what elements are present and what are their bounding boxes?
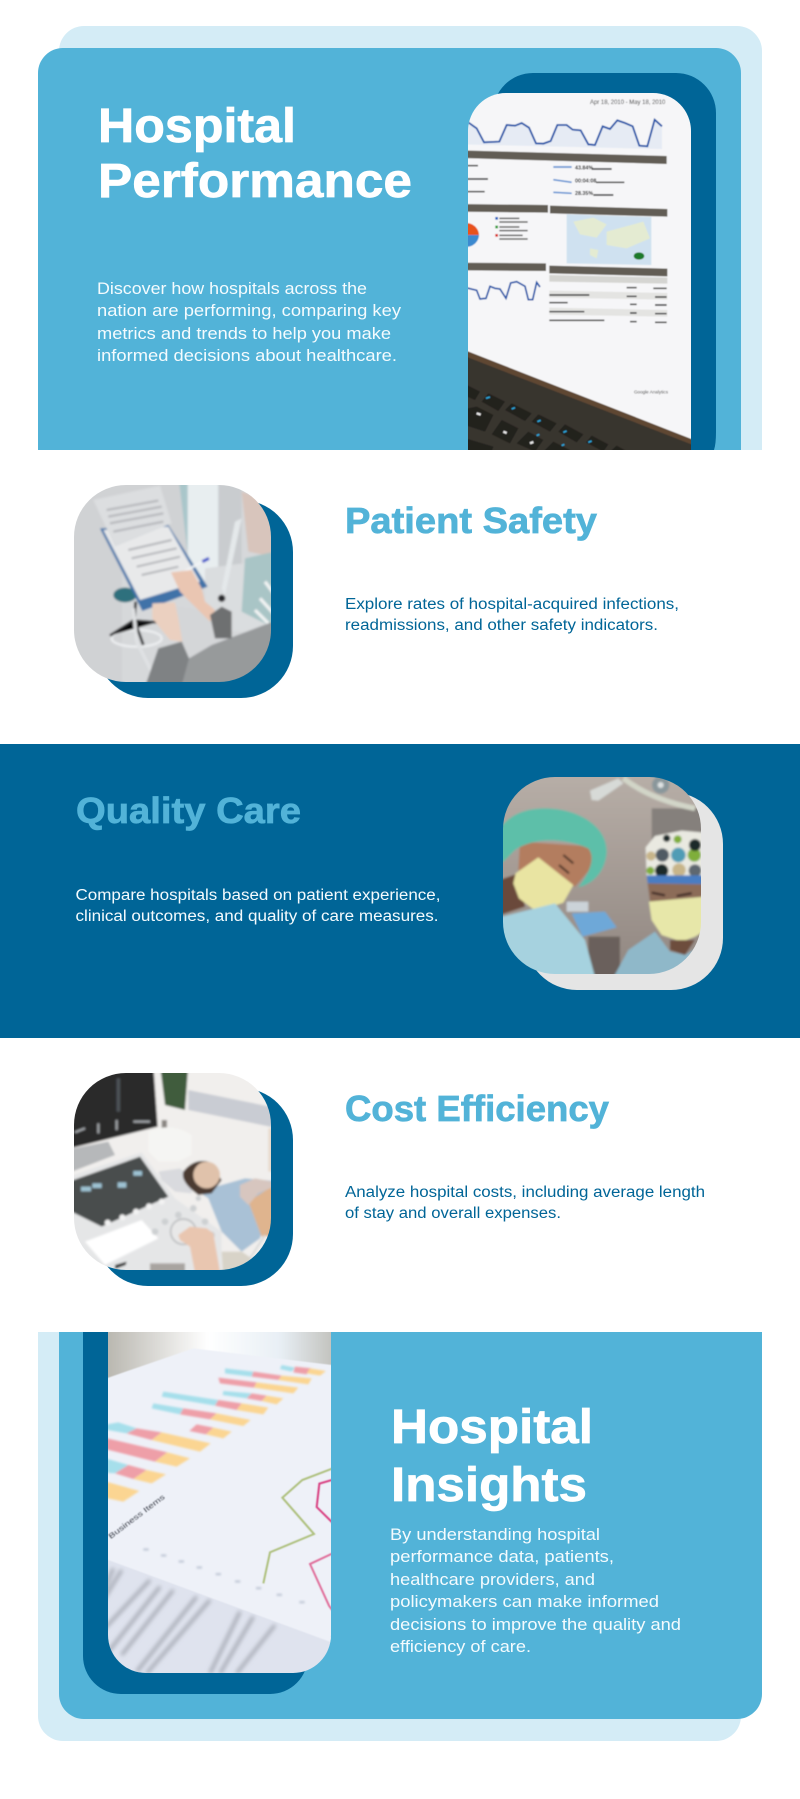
hero description <box>97 280 402 365</box>
hero title: Hospital <box>98 100 296 153</box>
patient safety image backing <box>96 500 293 698</box>
insights description: performance data, patients, <box>390 1548 614 1566</box>
photo: analytics report on laptop: 43.84% <box>575 166 593 172</box>
panel: insights back layer <box>38 1332 741 1741</box>
quality care text <box>76 887 440 925</box>
cost efficiency text: Analyze hospital costs, including average length <box>345 1184 705 1201</box>
insights description: By understanding hospital <box>390 1526 600 1544</box>
patient safety heading: Patient Safety <box>345 500 597 541</box>
hero image backing shape <box>493 73 716 450</box>
panel: quality care band <box>0 744 800 1038</box>
patient safety text: readmissions, and other safety indicators. <box>345 617 658 634</box>
insights description: efficiency of care. <box>390 1638 531 1656</box>
photo: surgeons <box>503 777 701 974</box>
cost efficiency heading: Cost Efficiency <box>345 1088 609 1129</box>
photo: printed bar and line charts: Business Items <box>106 1492 167 1541</box>
insights title: Insights <box>391 1459 587 1512</box>
photo: analytics report on laptop <box>468 93 691 450</box>
hero title <box>98 100 412 208</box>
cost efficiency text: of stay and overall expenses. <box>345 1205 561 1222</box>
quality care text: Compare hospitals based on patient experience, <box>76 887 440 904</box>
insights description: decisions to improve the quality and <box>390 1616 681 1634</box>
photo: clipboard and pen <box>74 485 271 682</box>
quality care image backing <box>525 792 723 990</box>
insights title: Hospital <box>391 1401 593 1454</box>
hero description: metrics and trends to help you make <box>97 325 391 343</box>
patient safety text <box>345 596 679 634</box>
hero title: Performance <box>98 155 412 208</box>
insights description: policymakers can make informed <box>390 1593 659 1611</box>
hero description: Discover how hospitals across the <box>97 280 367 298</box>
photo: analytics report on laptop: Google Analytics <box>634 390 668 396</box>
photo: analytics report on laptop: Apr 18, 2010 - May 18, 2010 <box>590 100 666 106</box>
insights image backing <box>83 1332 308 1694</box>
quality care heading: Quality Care <box>76 790 301 831</box>
insights title <box>391 1401 593 1512</box>
hero description: informed decisions about healthcare. <box>97 347 397 365</box>
insights description: healthcare providers, and <box>390 1571 595 1589</box>
panel: hero back layer <box>59 26 762 450</box>
panel: insights main card <box>59 1332 762 1719</box>
hero description: nation are performing, comparing key <box>97 302 402 320</box>
photo: ultrasound exam <box>74 1073 271 1270</box>
photo: analytics report on laptop: 00:04:08 <box>575 179 596 185</box>
insights description <box>390 1526 681 1656</box>
cost efficiency image backing <box>96 1088 293 1286</box>
panel: hero main card <box>38 48 741 450</box>
patient safety text: Explore rates of hospital-acquired infections, <box>345 596 679 613</box>
photo: printed bar and line charts <box>108 1332 331 1673</box>
cost efficiency text <box>345 1184 705 1222</box>
quality care text: clinical outcomes, and quality of care measures. <box>76 908 438 925</box>
photo: analytics report on laptop: 28.35% <box>575 191 593 197</box>
